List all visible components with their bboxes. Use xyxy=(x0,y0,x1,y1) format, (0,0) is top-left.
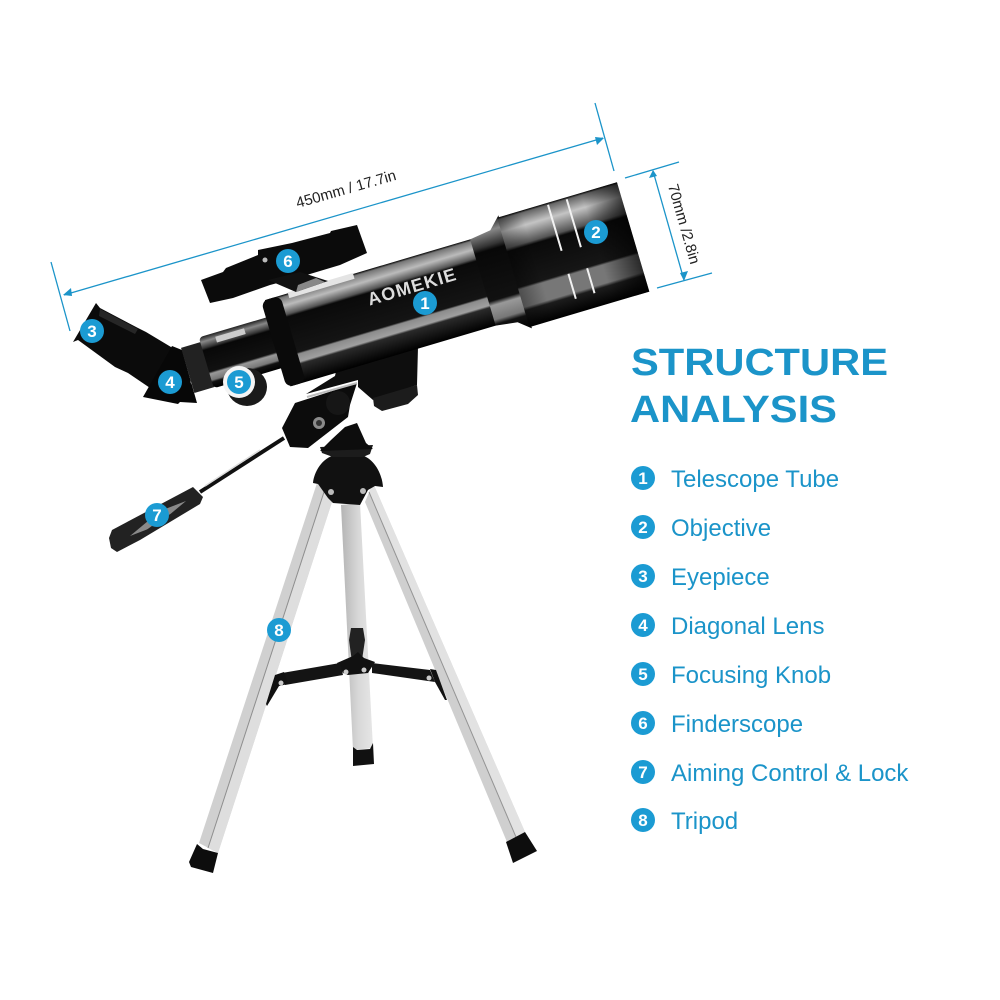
tripod xyxy=(189,423,537,873)
focusing knob xyxy=(223,366,267,406)
label plate xyxy=(215,328,246,342)
marker 4: 4 xyxy=(165,373,175,392)
marker 7 xyxy=(145,503,169,527)
heading: STRUCTURE xyxy=(631,342,888,384)
dimension: diameter xyxy=(625,162,712,288)
marker 8: 8 xyxy=(274,621,284,640)
marker 3: 3 xyxy=(87,322,97,341)
objective xyxy=(497,182,649,327)
marker 4 xyxy=(158,370,182,394)
length label: 450mm / 17.7in xyxy=(294,167,398,212)
tripod centre leg xyxy=(341,503,373,750)
marker 6 xyxy=(276,249,300,273)
marker 8 xyxy=(267,618,291,642)
diameter label: 70mm /2.8in xyxy=(664,182,703,266)
focus ring xyxy=(181,342,215,393)
tripod left leg xyxy=(199,483,332,853)
legend item 3: 3 xyxy=(638,567,648,586)
marker 1 xyxy=(413,291,437,315)
part markers on photo xyxy=(80,220,608,642)
legend item 5: 5 xyxy=(638,665,648,684)
legend item 4: Diagonal Lens xyxy=(671,613,824,640)
legend item 8: 8 xyxy=(638,811,648,830)
marker 5: 5 xyxy=(234,373,244,392)
tripod left foot xyxy=(189,844,218,873)
marker 2: 2 xyxy=(591,223,601,242)
marker 6: 6 xyxy=(283,252,293,271)
brand name: AOMEKIE xyxy=(365,264,459,309)
mount xyxy=(282,337,418,448)
legend item 8: Tripod xyxy=(671,808,738,835)
eyepiece xyxy=(73,303,176,392)
marker 5 xyxy=(227,370,251,394)
tripod right foot xyxy=(506,832,537,863)
telescope tube xyxy=(265,238,499,386)
spreader brace xyxy=(266,628,447,706)
legend item 8 xyxy=(631,808,738,835)
legend item 4: 4 xyxy=(638,616,648,635)
tripod head xyxy=(313,423,383,505)
tube collar xyxy=(466,215,532,338)
dimension: length xyxy=(51,103,614,331)
heading xyxy=(630,342,888,431)
legend item 3: Eyepiece xyxy=(671,564,770,591)
silver finder plate xyxy=(288,273,355,298)
legend item 1: Telescope Tube xyxy=(671,466,839,493)
marker 3 xyxy=(80,319,104,343)
diagonal lens xyxy=(143,346,197,404)
legend item 2: Objective xyxy=(671,515,771,542)
tripod centre foot xyxy=(353,743,374,766)
legend item 6: 6 xyxy=(638,714,648,733)
focuser tube xyxy=(199,316,287,388)
legend item 5: Focusing Knob xyxy=(671,662,831,689)
tripod right leg xyxy=(365,483,525,842)
legend item 7: Aiming Control & Lock xyxy=(671,760,909,787)
legend item 1: 1 xyxy=(638,469,648,488)
marker 7: 7 xyxy=(152,506,162,525)
marker 2 xyxy=(584,220,608,244)
legend item 2: 2 xyxy=(638,518,648,537)
legend item 6: Finderscope xyxy=(671,711,803,738)
heading: ANALYSIS xyxy=(630,389,837,431)
legend item 7: 7 xyxy=(638,763,648,782)
aiming control handle xyxy=(109,438,284,552)
legend list xyxy=(631,466,909,835)
tube rear cap xyxy=(261,296,306,388)
finderscope xyxy=(201,225,367,303)
main telescope assembly xyxy=(171,180,650,426)
marker 1: 1 xyxy=(420,294,430,313)
